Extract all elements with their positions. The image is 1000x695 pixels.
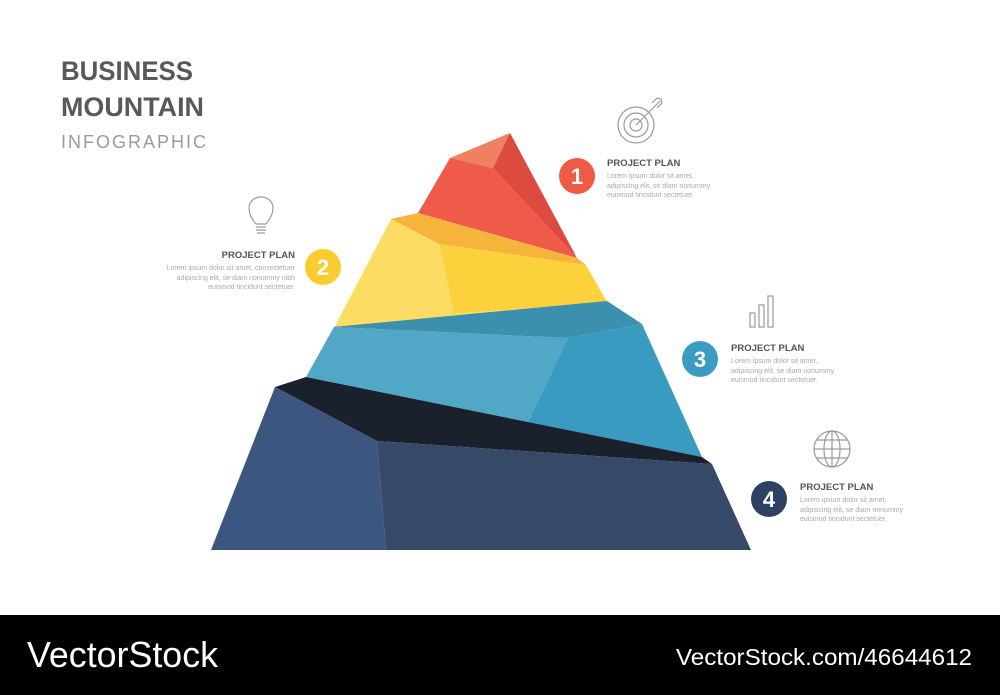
icon: light bulb — [249, 197, 273, 233]
step 3: 3 — [694, 347, 706, 372]
step 1: PROJECT PLAN — [607, 158, 681, 169]
step 3 — [682, 296, 835, 384]
step 3: PROJECT PLAN — [731, 343, 805, 354]
title — [61, 56, 206, 152]
step 2 — [167, 197, 341, 291]
step 2: euismod tincidunt sectetuer. — [208, 284, 295, 291]
title: MOUNTAIN — [61, 92, 204, 122]
icon: bar chart — [750, 296, 773, 327]
step 4: adipiscing elit, se diam nonummy — [800, 507, 904, 514]
step 2: adipiscing elit, se diam nonummy nibh — [177, 275, 295, 282]
step 4: Lorem ipsum dolor sit amet, — [800, 497, 886, 504]
step 2: 2 — [317, 255, 329, 280]
step 3: Lorem ipsum dolor sit amet, — [731, 358, 817, 365]
step 4: euismod tincidunt sectetuer. — [800, 516, 887, 523]
step 1: adipiscing elit, se diam nonummy — [607, 183, 711, 190]
layer 3 blue — [306, 301, 702, 457]
title: BUSINESS — [61, 56, 193, 86]
layer 4 navy — [211, 377, 751, 550]
step 1: euismod tincidunt sectetuer. — [607, 192, 694, 199]
step 2: PROJECT PLAN — [222, 250, 295, 261]
step 1: 1 — [571, 164, 583, 189]
step 4: 4 — [763, 487, 776, 512]
layer 1 red — [418, 133, 577, 258]
mountain — [211, 133, 751, 550]
step 3: adipiscing elit, se diam nonummy — [731, 368, 835, 375]
footer: VectorStock — [27, 634, 219, 675]
step 3: euismod tincidunt sectetuer. — [731, 377, 818, 384]
step 1 — [559, 98, 711, 199]
icon: globe — [814, 431, 850, 467]
title: INFOGRAPHIC — [61, 132, 206, 152]
step 4: PROJECT PLAN — [800, 482, 874, 493]
layer 2 yellow — [334, 213, 607, 328]
step 4 — [751, 431, 904, 523]
footer: VectorStock.com/46644612 — [676, 644, 972, 670]
step 2: Lorem ipsum dolor sit amet, consectetuer — [167, 265, 296, 272]
step 1: Lorem ipsum dolor sit amet, — [607, 173, 693, 180]
footer — [0, 615, 1000, 695]
icon: target — [618, 98, 662, 143]
